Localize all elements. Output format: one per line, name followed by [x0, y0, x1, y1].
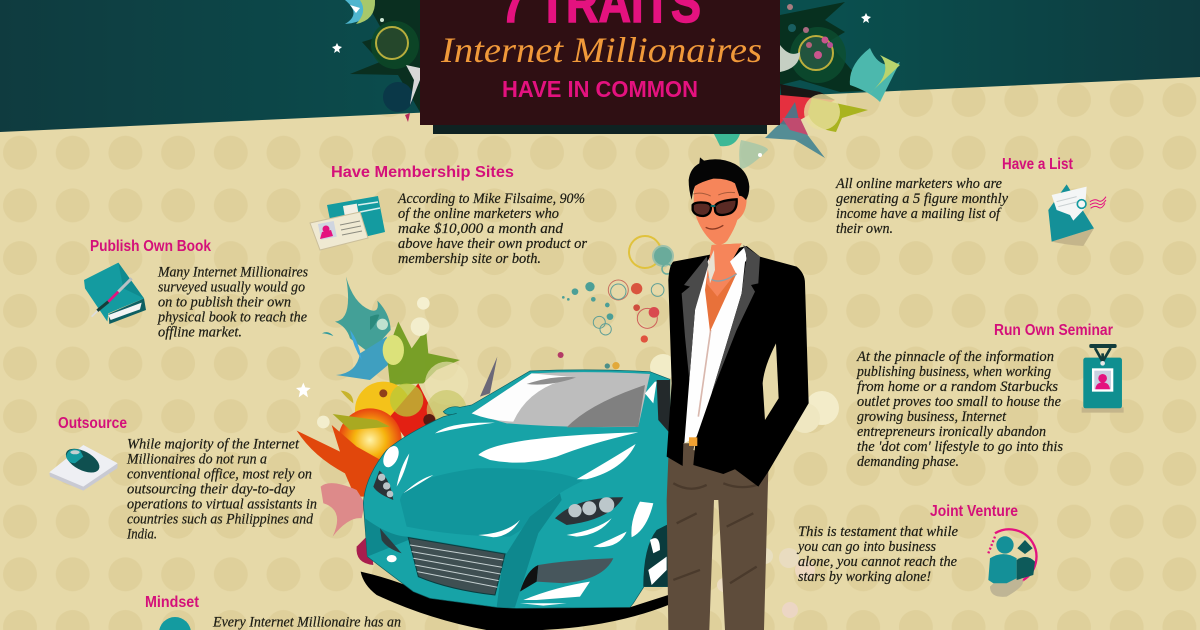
text block: growing business, Internet — [857, 409, 1007, 425]
car — [361, 370, 670, 630]
text block — [397, 191, 587, 267]
chest skin — [705, 243, 742, 332]
text block: membership site or both. — [398, 251, 541, 267]
trait: Have a List — [835, 156, 1106, 246]
text block: operations to virtual assistants in — [127, 496, 317, 512]
hair — [689, 157, 749, 200]
icon: name badge — [1082, 344, 1124, 413]
icon: mindset teal circle — [159, 617, 191, 630]
text block — [835, 176, 1009, 237]
heading: Run Own Seminar — [994, 322, 1113, 339]
necklace — [708, 274, 737, 281]
text block: countries such as Philippines and — [127, 512, 314, 528]
icon: computer mouse on pad — [49, 444, 118, 491]
floral: right of title — [714, 2, 900, 169]
trousers — [667, 443, 768, 630]
heading: Publish Own Book — [90, 238, 211, 255]
text block: their own. — [836, 221, 893, 237]
neck and face — [694, 177, 747, 245]
subtitle: Have in Common: HAVE IN COMMON — [502, 76, 698, 102]
text block: from home or a random Starbucks — [857, 379, 1058, 395]
hood shading — [400, 468, 583, 537]
car body — [363, 370, 670, 608]
text block: surveyed usually would go — [158, 280, 305, 296]
text block: conventional office, most rely on — [127, 466, 312, 482]
trait: Publish Own Book — [84, 238, 308, 340]
title panel — [420, 0, 780, 134]
bubbles and rings decoration — [558, 236, 839, 618]
text block — [157, 264, 308, 340]
text block: While majority of the Internet — [127, 436, 300, 452]
arm gap — [763, 343, 779, 420]
text block: income have a mailing list of — [836, 206, 1002, 222]
text block: on to publish their own — [158, 294, 291, 310]
text block: At the pinnacle of the information — [856, 349, 1054, 365]
text block: alone, you cannot reach the — [798, 554, 958, 570]
text block: This is testament that while — [798, 524, 959, 540]
text block: According to Mike Filsaime, 90% — [397, 191, 585, 207]
text block: generating a 5 figure monthly — [836, 191, 1009, 207]
text block — [796, 524, 959, 585]
heading: Have a List — [1002, 156, 1073, 173]
floral: left of title — [332, 0, 420, 122]
floral splash behind car — [296, 277, 497, 565]
trait: Have Membership Sites — [310, 164, 587, 267]
heading: Mindset — [145, 594, 199, 611]
trait: Outsource — [49, 415, 317, 542]
shirt — [684, 247, 747, 443]
grille — [408, 538, 505, 595]
wheel — [643, 523, 670, 587]
text block: India. — [126, 526, 157, 542]
belt buckle — [689, 437, 697, 446]
text block: physical book to reach the — [157, 310, 308, 326]
text block: outsourcing their day-to-day — [127, 482, 296, 498]
left headlight — [373, 471, 393, 500]
heading: Joint Venture — [930, 503, 1018, 520]
icon: envelope with letter — [1048, 184, 1106, 246]
subtitle: Internet Millionaires: Internet Millionaires — [440, 30, 762, 70]
text block: you can go into business — [796, 539, 936, 555]
icon: business cards — [310, 196, 385, 250]
header band: dark teal slanted banner — [0, 0, 1200, 132]
lapels — [682, 257, 708, 380]
icon: book and pen — [84, 263, 146, 324]
text block: demanding phase. — [857, 454, 959, 470]
text block: publishing business, when working — [856, 364, 1051, 380]
jacket — [667, 246, 809, 487]
trait: Joint Venture — [796, 503, 1036, 597]
icon: two people in a ring — [988, 529, 1036, 597]
text block: make $10,000 a month and — [398, 221, 564, 237]
text block: outlet proves too small to house the — [857, 394, 1062, 410]
trait: Run Own Seminar — [856, 322, 1124, 470]
right headlight — [555, 497, 623, 525]
sunglasses — [693, 199, 737, 216]
text block: of the online marketers who — [398, 206, 559, 222]
text block: the 'dot com' lifestyle to go into this — [857, 439, 1063, 455]
text block: Millionaires do not run a — [126, 452, 267, 468]
text block: entrepreneurs ironically abandon — [857, 424, 1046, 440]
text block — [856, 349, 1063, 470]
collar — [707, 250, 715, 283]
man figure — [667, 157, 809, 630]
text block: above have their own product or — [398, 236, 587, 252]
text block: offline market. — [158, 324, 242, 340]
heading: Outsource — [58, 415, 127, 432]
heading: Have Membership Sites — [331, 164, 514, 181]
text block: Many Internet Millionaires — [157, 264, 308, 280]
text block: stars by working alone! — [798, 569, 931, 585]
trait: Mindset — [145, 594, 401, 630]
windshield — [472, 372, 650, 427]
text block: All online marketers who are — [835, 176, 1003, 192]
lower vent — [537, 558, 613, 583]
car shadow — [361, 572, 668, 630]
hood highlights — [478, 432, 638, 463]
text block — [126, 436, 317, 542]
mouth — [706, 225, 723, 229]
